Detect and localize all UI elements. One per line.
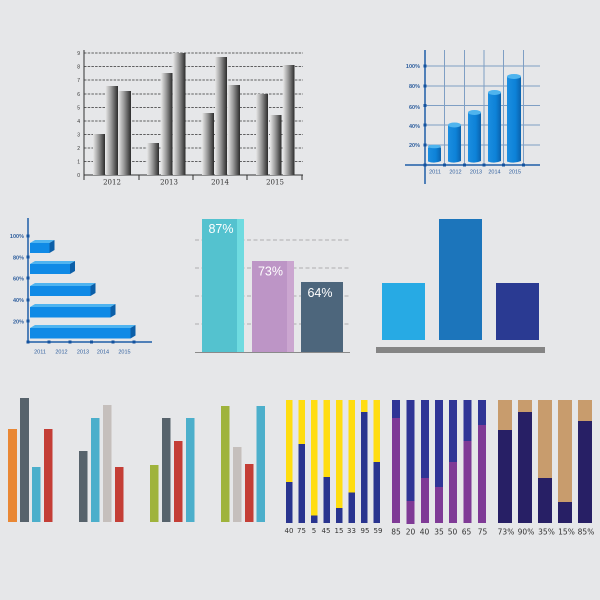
axis labels: 60% (13, 276, 24, 282)
value labels (498, 528, 594, 536)
year labels: 2015 (266, 178, 284, 186)
value labels: 35% (538, 528, 555, 536)
cylinders (428, 74, 521, 163)
value labels: 40 (420, 528, 429, 536)
value labels: 73% (498, 528, 514, 536)
value labels: 35 (434, 528, 444, 536)
year labels (103, 178, 284, 186)
3D bars (30, 240, 136, 338)
y axis numbers: 5 (77, 106, 80, 112)
axis labels (10, 234, 131, 356)
axis labels: 20% (409, 143, 420, 149)
y axis numbers: 4 (77, 119, 80, 125)
axis labels: 40% (13, 298, 24, 304)
axis labels: 20% (13, 320, 24, 326)
value labels: 65 (462, 528, 471, 536)
value labels: 50 (448, 528, 457, 536)
64% column: 64% (307, 286, 333, 300)
axis labels (406, 64, 521, 176)
axis labels: 2011 (429, 170, 441, 176)
y axis numbers: 7 (77, 78, 80, 84)
axis labels: 2013 (77, 350, 89, 356)
value labels: 45 (322, 527, 330, 535)
value labels: 95 (361, 527, 369, 535)
87% column: 87% (208, 222, 234, 236)
axis labels: 2012 (449, 170, 462, 176)
value labels: 15% (558, 528, 575, 536)
axis labels: 2015 (509, 170, 521, 176)
year labels: 2013 (160, 178, 178, 186)
value labels: 85% (578, 528, 594, 536)
y axis numbers: 8 (77, 64, 80, 70)
axis labels: 40% (409, 124, 420, 130)
value labels: 75 (478, 528, 487, 536)
panel: tan and navy stacked bars (498, 400, 594, 536)
value labels: 15 (335, 527, 343, 535)
87% column (202, 219, 244, 352)
64% column (301, 282, 343, 352)
panel: blue cylinder chart (405, 50, 540, 184)
axis labels: 2011 (34, 350, 46, 356)
axis labels: 2014 (488, 170, 501, 176)
panel: small multicolour bars group 2 (79, 405, 124, 522)
columns (93, 53, 294, 175)
axis labels: 80% (13, 256, 24, 262)
value labels: 40 (285, 527, 293, 535)
axis labels: 100% (406, 64, 420, 70)
axis labels: 2013 (470, 170, 482, 176)
y axis numbers: 3 (77, 132, 80, 138)
y axis numbers: 1 (77, 160, 80, 166)
value labels (285, 527, 382, 535)
axis labels: 2015 (118, 350, 131, 356)
panel: small multicolour bars group 3 (150, 418, 194, 522)
value labels: 75 (297, 527, 306, 535)
value labels: 85 (391, 528, 401, 536)
value labels (391, 528, 487, 536)
y axis numbers: 6 (77, 92, 80, 98)
panel: yellow and navy stacked bars (285, 400, 382, 535)
axis labels: 60% (409, 105, 420, 111)
73% column: 73% (258, 264, 283, 278)
panel: blue horizontal 3D bar chart (10, 218, 152, 356)
panel: small multicolour bars group 1 (8, 398, 52, 522)
axis labels: 2014 (97, 350, 109, 356)
value labels: 90% (518, 528, 534, 536)
y axis numbers: 0 (77, 173, 80, 179)
panel: three blue columns (376, 219, 545, 353)
year labels: 2012 (103, 178, 121, 186)
axis labels: 100% (10, 234, 24, 240)
value labels: 59 (374, 527, 382, 535)
value labels: 20 (406, 528, 415, 536)
value labels: 33 (347, 527, 356, 535)
axis labels: 2012 (55, 350, 68, 356)
y axis numbers (77, 51, 80, 179)
panel: purple and blue stacked bars (391, 400, 487, 536)
panel: grey 3D column chart (77, 50, 303, 186)
y axis numbers: 2 (77, 146, 80, 152)
year labels: 2014 (211, 178, 229, 186)
y axis numbers: 9 (77, 51, 80, 57)
axis labels: 80% (409, 84, 420, 90)
panel: small multicolour bars group 4 (221, 406, 265, 522)
panel: percentage columns (195, 219, 350, 352)
value labels: 5 (312, 527, 316, 535)
73% column (252, 261, 294, 352)
